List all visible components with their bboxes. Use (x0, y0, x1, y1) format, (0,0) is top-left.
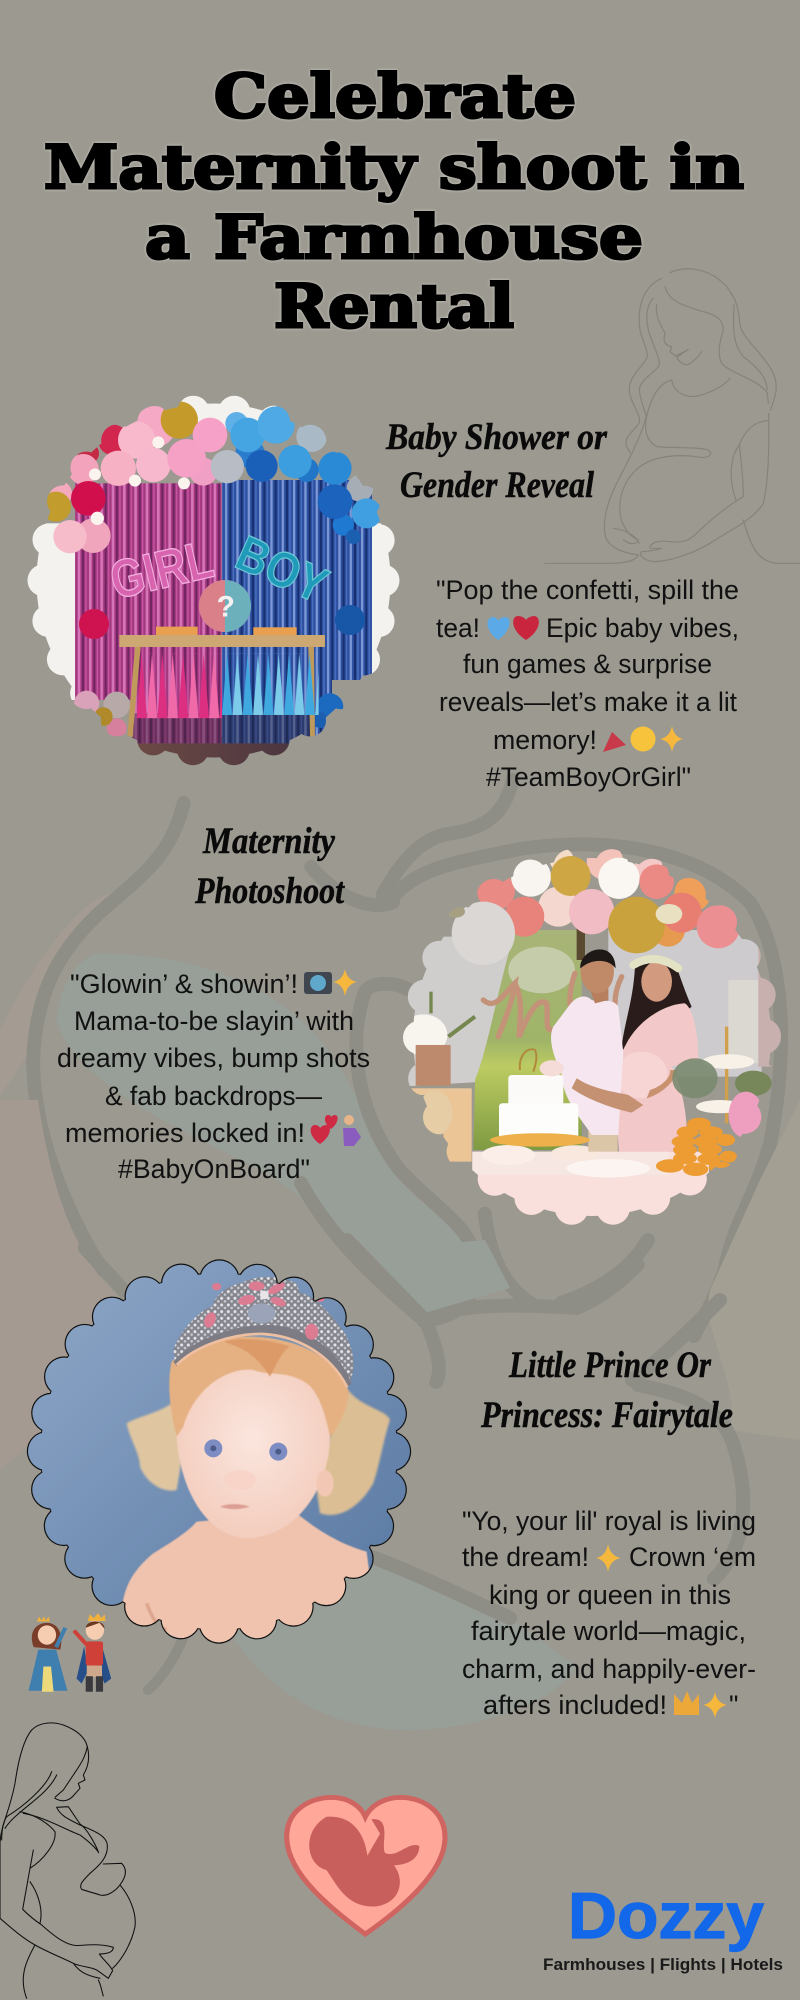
icon: sparkles (660, 726, 683, 752)
icon: sparkles (333, 969, 357, 996)
heading: little prince or princess (480, 1345, 733, 1436)
flowers right (672, 1058, 718, 1098)
text block: fairytale: charm, and happily-ever- (462, 1654, 756, 1684)
stand and plates right (725, 1027, 728, 1123)
text block: fairytale: fairytale world—magic, (471, 1616, 746, 1646)
curtains (75, 483, 222, 700)
curtains (408, 936, 509, 1086)
nose and mouth (232, 1470, 255, 1480)
heading: maternity photoshoot: Maternity (202, 821, 336, 862)
heading: little prince or princess: Princess: Fairytale (480, 1395, 733, 1436)
balloons (446, 843, 740, 965)
text block: maternity: & fab backdrops— (105, 1081, 322, 1111)
text block: baby shower: Epic baby vibes, (546, 613, 739, 643)
text block: fairytale: Crown ‘em (629, 1542, 756, 1572)
title line 2: Maternity shoot in (44, 133, 744, 203)
title line 4: Rental (274, 272, 514, 342)
icon: princess and prince (29, 1613, 111, 1692)
body (122, 1513, 373, 1650)
table (472, 1152, 709, 1228)
text block: baby shower: "Pop the confetti, spill the (436, 575, 739, 605)
text block: baby shower: #TeamBoyOrGirl" (486, 762, 691, 792)
left props (399, 1014, 447, 1056)
photo: baby shower balloon backdrop: BOY (228, 525, 336, 614)
table with tassels (156, 627, 198, 635)
icon: baby face (630, 726, 656, 752)
text block: maternity: memories locked in! (65, 1118, 305, 1148)
side curls (127, 1390, 390, 1515)
title line 3: a Farmhouse (145, 203, 643, 273)
icon: sparkles (703, 1692, 727, 1718)
text block: baby shower: fun games & surprise (463, 649, 712, 679)
photo: baby shower balloon backdrop: ? (217, 591, 235, 624)
icon: sparkling heart (513, 616, 539, 640)
tagline: Farmhouses | Flights | Hotels (543, 1955, 783, 1974)
text block: fairytale: "Yo, your lil' royal is living (462, 1506, 756, 1536)
logo: Dozzy (543, 1879, 783, 1974)
face (176, 1357, 330, 1538)
photo: baby shower balloon backdrop (27, 395, 400, 767)
icon: fetus in heart (287, 1797, 445, 1934)
heading: baby shower (385, 417, 608, 506)
balloons (41, 401, 382, 738)
text block: maternity: "Glowin’ & showin’! (70, 969, 298, 999)
sign (483, 973, 622, 1037)
wordmark: Dozzy (568, 1879, 764, 1952)
woman (622, 963, 692, 1050)
icon: pregnant woman (343, 1115, 361, 1146)
text block: fairytale (462, 1506, 756, 1720)
icon: camera flash (304, 972, 332, 994)
fringe (169, 1336, 348, 1437)
title line 1: Celebrate (214, 62, 576, 132)
background: faint pregnant figure watermark (0, 780, 800, 1730)
title (44, 62, 744, 342)
text block: maternity: dreamy vibes, bump shots (57, 1043, 370, 1073)
icon: blue heart (488, 617, 510, 640)
heading: maternity photoshoot (194, 821, 345, 912)
icon: party popper (603, 732, 626, 752)
line art: pregnant woman, top right (545, 269, 800, 563)
heading: baby shower: Baby Shower or (385, 417, 608, 458)
heading: maternity photoshoot: Photoshoot (194, 871, 345, 912)
tiara (173, 1277, 354, 1383)
white scallop base (27, 395, 400, 700)
line art: pregnant woman, bottom left (0, 1723, 135, 1998)
photo: baby with tiara, scalloped frame (20, 1250, 420, 1650)
text block: maternity (57, 969, 370, 1184)
text block: baby shower: memory! (493, 725, 597, 755)
icon: crown (674, 1691, 699, 1715)
text block: baby shower: tea! (436, 613, 480, 643)
princess (29, 1617, 67, 1692)
text block: fairytale: the dream! (462, 1542, 589, 1572)
icon: sparkles (596, 1544, 621, 1572)
text block: baby shower: reveals—let’s make it a lit (439, 687, 738, 717)
photo: maternity couple with balloons (399, 843, 785, 1228)
heading: baby shower: Gender Reveal (400, 465, 595, 506)
icon: two hearts (311, 1115, 338, 1144)
man (588, 1127, 618, 1152)
foil letters: GIRL (105, 530, 219, 611)
text block: fairytale: king or queen in this (489, 1580, 731, 1610)
eyes (204, 1439, 222, 1457)
text block: fairytale: " (729, 1690, 738, 1720)
text block: fairytale: afters included! (483, 1690, 667, 1720)
prince (74, 1613, 111, 1692)
donuts (656, 1118, 737, 1176)
baby portrait (20, 1250, 420, 1650)
garden (473, 930, 582, 1150)
heading: little prince or princess: Little Prince Or (508, 1345, 712, 1386)
text block: maternity: Mama-to-be slayin’ with (74, 1006, 354, 1036)
cake (508, 1075, 564, 1104)
text block: maternity: #BabyOnBoard" (118, 1154, 310, 1184)
text block: baby shower (436, 575, 739, 792)
dark floor scallops (132, 737, 298, 767)
round badge (199, 580, 251, 632)
scallop outline (40, 1272, 398, 1630)
